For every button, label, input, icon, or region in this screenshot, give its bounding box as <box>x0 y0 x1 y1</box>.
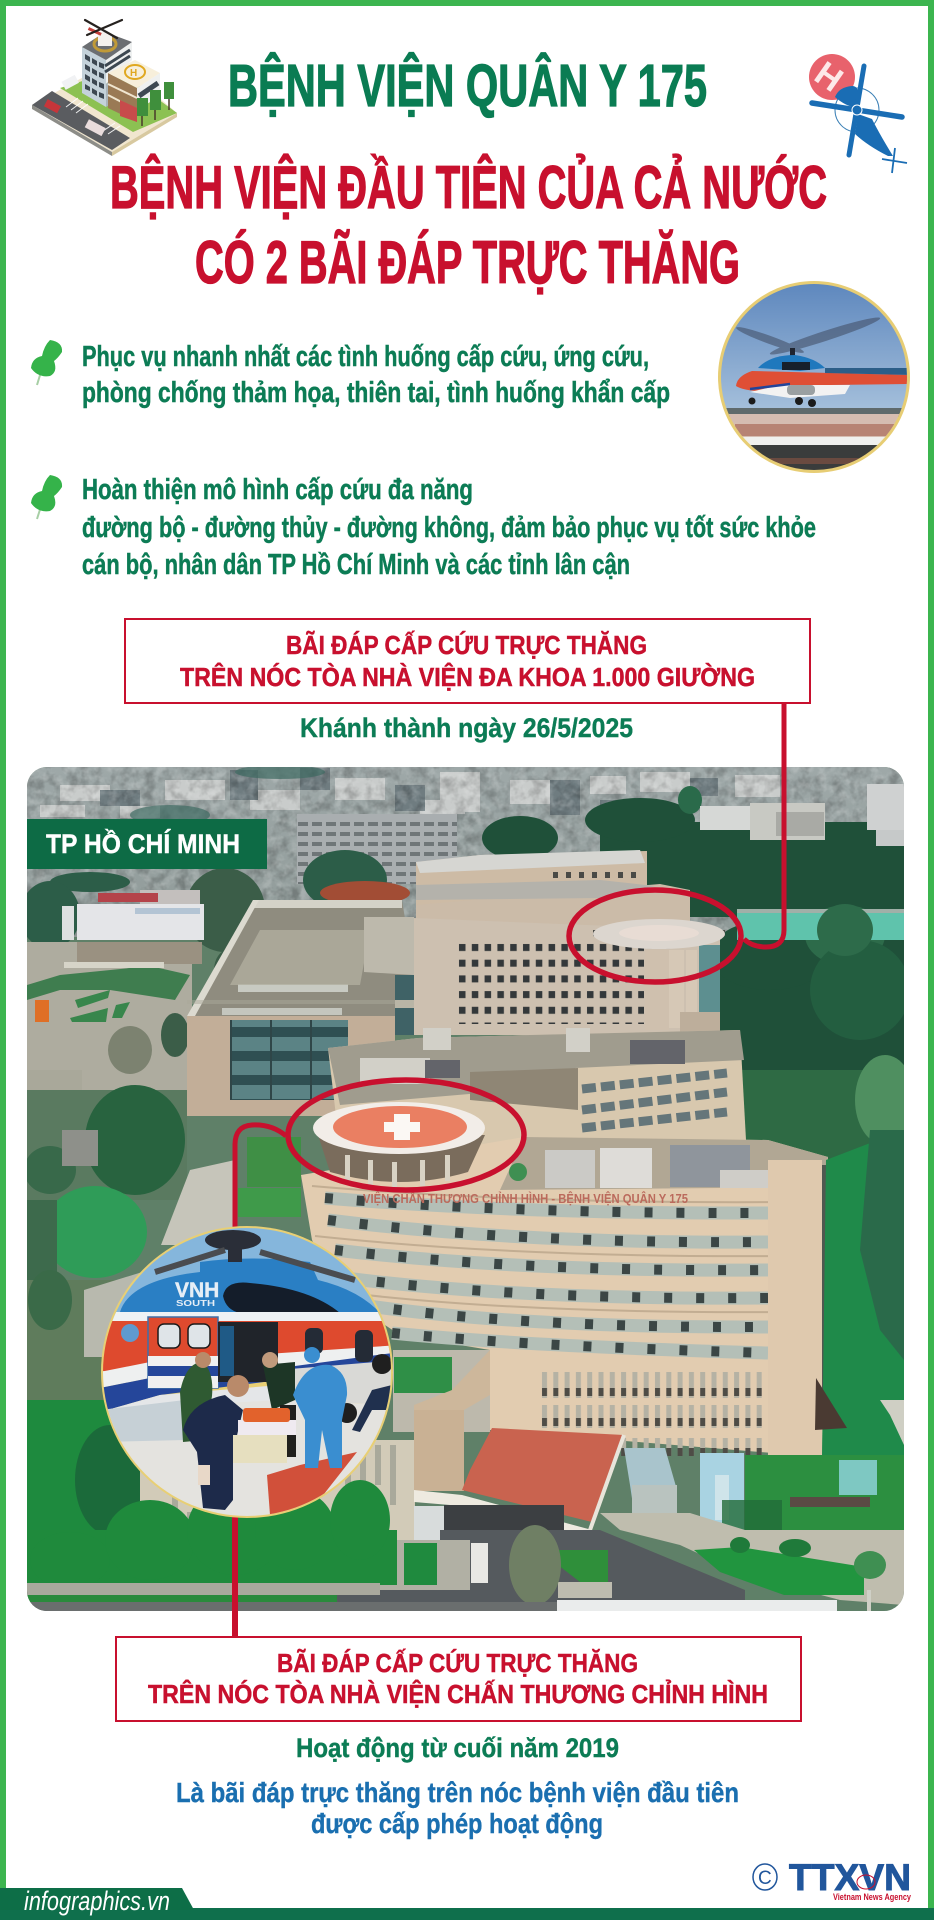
text block: Phục vụ nhanh nhất các tình huống cấp cứu, ứng cứu, <box>82 341 649 373</box>
plaza near lower wing <box>380 1540 470 1590</box>
rooftop plant <box>500 1137 828 1190</box>
low white hall <box>62 890 204 940</box>
rear block <box>416 850 647 905</box>
callout box: second helipad: TRÊN NÓC TÒA NHÀ VIỆN CHẤN THƯƠNG CHỈNH HÌNH <box>148 1679 768 1709</box>
left block <box>187 900 425 1116</box>
entrance canopy with red roof <box>414 1428 624 1545</box>
note: first licensed rooftop helipad: được cấp phép hoạt động <box>311 1808 603 1839</box>
icon: isometric hospital <box>32 20 177 156</box>
callout 1: connector and red circle <box>569 703 784 982</box>
text block: Hoàn thiện mô hình cấp cứu đa năng <box>82 474 473 506</box>
logo: TTXVN: C <box>758 1868 772 1889</box>
icon: isometric hospital: H <box>130 68 137 79</box>
helipad: tower rooftop <box>593 919 725 949</box>
callout box: second helipad: BÃI ĐÁP CẤP CỨU TRỰC THĂNG <box>277 1648 638 1678</box>
icon: green pin <box>31 340 62 385</box>
second rear layer <box>416 880 690 926</box>
courtyard and flat roof <box>84 1137 301 1357</box>
photo: emergency transfer from VNH South helicopter: SOUTH <box>176 1299 215 1308</box>
bullet 2 <box>31 474 816 581</box>
far blocks near trees <box>700 784 904 846</box>
helicopter landing tower <box>82 47 106 107</box>
date: start of operation: Hoạt động từ cuối năm 2019 <box>296 1733 619 1763</box>
icon: helicopter with H badge: H <box>808 54 850 100</box>
label: city: TP HỒ CHÍ MINH <box>46 828 240 859</box>
callout box: first helipad: TRÊN NÓC TÒA NHÀ VIỆN ĐA KHOA 1.000 GIƯỜNG <box>180 662 755 692</box>
callout box: first helipad: BÃI ĐÁP CẤP CỨU TRỰC THĂNG <box>286 630 647 660</box>
tower with windows <box>414 918 720 1035</box>
footer band with site tab: infographics.vn <box>24 1886 170 1916</box>
trees <box>137 82 174 116</box>
small pavilions <box>624 1448 744 1537</box>
main building <box>301 1137 828 1457</box>
callout box: first helipad <box>125 619 810 703</box>
title: hospital name: BỆNH VIỆN QUÂN Y 175 <box>228 52 707 119</box>
text block: cán bộ, nhân dân TP Hồ Chí Minh và các tỉnh lân cận <box>82 549 630 581</box>
apartment block <box>297 814 457 884</box>
forecourt and road <box>27 1513 904 1611</box>
vehicles <box>61 75 79 90</box>
photo: emergency transfer from VNH South helicopter <box>100 1225 400 1525</box>
people <box>180 1347 392 1510</box>
left trees <box>24 1085 187 1535</box>
left grounds <box>27 942 202 1090</box>
photo: helicopter hovering over rooftop helipad <box>718 280 910 475</box>
label: city <box>27 819 267 869</box>
note: first licensed rooftop helipad: Là bãi đáp trực thăng trên nóc bệnh viện đầu tiên <box>176 1777 739 1808</box>
tree masses <box>482 786 915 1190</box>
logo: TTXVN: TTXVN <box>789 1857 911 1898</box>
photo: aerial view of Military Hospital 175 <box>20 765 915 1611</box>
front trees <box>27 1480 397 1588</box>
sign on building: VIỆN CHẤN THƯƠNG CHỈNH HÌNH - BỆNH VIỆN QUÂN Y 175 <box>363 1191 688 1206</box>
landing pad <box>108 1400 388 1516</box>
icon: green pin <box>31 475 62 519</box>
text block: phòng chống thảm họa, thiên tai, tình huống khẩn cấp <box>82 377 670 409</box>
photo: emergency transfer from VNH South helicopter: VNH <box>175 1279 219 1302</box>
callout box: second helipad <box>116 1637 801 1721</box>
footer band with site tab <box>0 1886 934 1920</box>
callout 2: connector and red circle <box>235 1080 524 1636</box>
helipad: trauma block rooftop <box>313 1102 485 1188</box>
title: headline <box>110 154 827 296</box>
logo: TTXVN <box>753 1857 911 1902</box>
city background <box>27 765 904 937</box>
second building <box>108 73 137 122</box>
note: first licensed rooftop helipad <box>176 1777 739 1839</box>
icon: helicopter with H badge <box>808 54 907 173</box>
logo: TTXVN: Vietnam News Agency <box>833 1892 911 1902</box>
cabin door <box>148 1317 218 1388</box>
middle curved block <box>328 1028 746 1150</box>
right gardens <box>722 1130 904 1531</box>
text block <box>82 474 816 581</box>
teal building <box>737 909 904 940</box>
bullet 1 <box>31 340 670 409</box>
text block <box>82 341 670 409</box>
trees behind left block <box>27 850 410 968</box>
lower wing left <box>140 1350 490 1540</box>
date: inauguration: Khánh thành ngày 26/5/2025 <box>300 713 633 743</box>
